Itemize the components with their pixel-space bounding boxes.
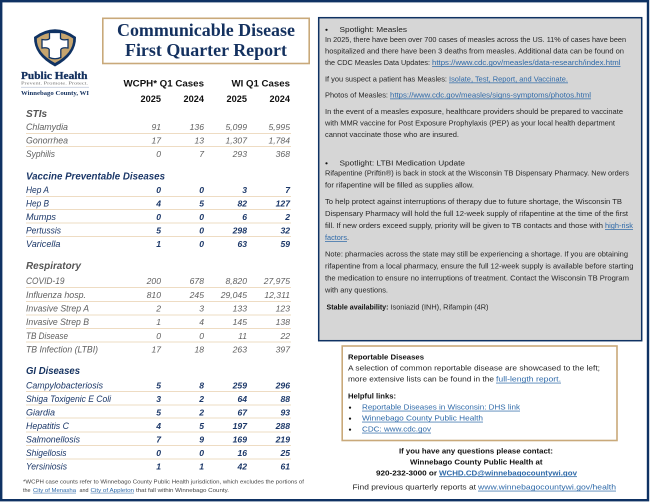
contact information: Winnebago County Public Health at	[410, 457, 543, 466]
row: Pertussis: 32	[280, 226, 290, 236]
contact information: If you have any questions please contact:	[399, 446, 553, 455]
footnote: *WCPH case counts refer to Winnebago County Public Health jurisdiction, which excludes the portions of	[23, 480, 305, 486]
row: Hep B: 127	[276, 198, 291, 208]
row: Campylobacteriosis: Campylobacteriosis	[26, 380, 104, 390]
row: TB Infection (LTBI): 18	[194, 344, 204, 354]
row: TB Disease	[26, 331, 290, 341]
previous reports link: Find previous quarterly reports at	[352, 483, 476, 492]
row: Yersiniosis: 1	[199, 462, 204, 472]
row: Influenza hosp.: 12,311	[264, 290, 290, 300]
row: Influenza hosp.	[26, 290, 290, 300]
row: Salmonellosis: 169	[233, 434, 247, 444]
row: Influenza hosp.: 29,045	[220, 290, 247, 300]
row: Mumps	[26, 212, 290, 222]
logo county name: Winnebago County, WI	[21, 91, 90, 97]
row: Hep B: 82	[237, 198, 247, 208]
spotlight: LTBI medication update: Note: pharmacies across the state may still be experiencing a shortage. If you are obtaining	[325, 250, 628, 259]
row: Hep A: 0	[156, 185, 161, 195]
spotlight: measles: with MMR vaccine for Post Exposure Prophylaxis (PEP) as your local health department	[324, 119, 615, 128]
row: COVID-19: 200	[146, 276, 161, 286]
row: Salmonellosis: Salmonellosis	[26, 434, 81, 444]
row: Shiga Toxigenic E Coli: Shiga Toxigenic E Coli	[26, 394, 112, 404]
spotlight: LTBI medication update: rifapentine from a local pharmacy, ensure the full 12-week supply is available before starting	[325, 262, 634, 271]
row: Hepatitis C: 4	[155, 421, 161, 431]
row: Shiga Toxigenic E Coli: 3	[156, 394, 161, 404]
spotlight: measles: Spotlight: Measles	[340, 25, 407, 34]
row: Gonorrhea	[26, 136, 290, 146]
row: TB Disease: 22	[279, 331, 290, 341]
row: Syphilis: 293	[232, 149, 247, 159]
row: Salmonellosis	[26, 434, 290, 444]
table column headers	[124, 78, 291, 104]
row: TB Infection (LTBI): 17	[151, 344, 162, 354]
row: COVID-19: 27,975	[263, 276, 290, 286]
spotlight: LTBI medication update: Isoniazid (INH), Rifampin (4R)	[390, 302, 488, 311]
table section: Vaccine Preventable Diseases	[26, 172, 291, 249]
row: Syphilis	[26, 149, 290, 159]
panel: reportable diseases: Helpful links:	[348, 391, 396, 400]
row: Campylobacteriosis	[26, 380, 290, 390]
row: Invasive Strep A: 133	[233, 304, 247, 314]
spotlight: measles: https://www.cdc.gov/measles/data-research/index.html	[432, 58, 621, 67]
helpful links list: Reportable Diseases in Wisconsin: DHS link	[362, 403, 520, 412]
row: TB Disease: 11	[238, 331, 247, 341]
row: Chlamydia: 91	[151, 122, 161, 132]
title box: Communicable Disease	[117, 20, 295, 40]
row: Invasive Strep A: 123	[276, 304, 290, 314]
row: Chlamydia: 136	[190, 122, 204, 132]
spotlight: LTBI medication update: factors	[325, 233, 347, 242]
row: Influenza hosp.: 810	[147, 290, 161, 300]
table section: GI Diseases	[26, 366, 291, 472]
row: TB Infection (LTBI)	[26, 344, 291, 354]
spotlight: LTBI medication update: fill. If new orders exceed supply, priority will be given to TB contacts and those with	[325, 221, 603, 230]
footnote	[23, 480, 305, 494]
row: Mumps: Mumps	[26, 212, 57, 222]
row: Hepatitis C: Hepatitis C	[26, 421, 70, 431]
row: Invasive Strep B: 145	[233, 317, 247, 327]
row: Shigellosis: 0	[199, 448, 204, 458]
row: Pertussis: Pertussis	[26, 226, 62, 236]
spotlight: measles: the CDC Measles Data Updates:	[325, 58, 430, 67]
table column headers: 2024	[270, 94, 291, 104]
row: Hepatitis C: 197	[233, 421, 248, 431]
spotlight: measles: https://www.cdc.gov/measles/signs-symptoms/photos.html	[390, 90, 591, 100]
row: COVID-19: COVID-19	[26, 276, 65, 286]
row: Varicella	[26, 239, 290, 249]
row: COVID-19: 8,820	[225, 276, 247, 286]
row: Shigellosis: 25	[279, 448, 290, 458]
row: Invasive Strep B: 4	[199, 317, 204, 327]
spotlight: LTBI medication update: the medication to ensure no interruptions of treatment. Contact the Wisconsin TB Program	[325, 274, 629, 283]
contact information: WCHD.CD@winnebagocountywi.gov	[439, 468, 578, 477]
helpful links list: Winnebago County Public Health	[362, 414, 483, 423]
table column headers: 2025	[141, 94, 161, 104]
table section: STIs	[26, 109, 291, 159]
title box: First Quarter Report	[125, 40, 287, 60]
row: Hep B	[26, 198, 291, 208]
table column headers: 2024	[184, 94, 205, 104]
row: Invasive Strep B	[26, 317, 290, 327]
row: COVID-19: 678	[190, 276, 204, 286]
table column headers: WI Q1 Cases	[232, 78, 290, 88]
footnote: that fall within Winnebago County.	[136, 488, 229, 494]
row: TB Infection (LTBI): 263	[232, 344, 247, 354]
row: Invasive Strep A: Invasive Strep A	[26, 304, 89, 314]
row: Hep B: Hep B	[26, 198, 49, 208]
spotlight: LTBI medication update: high-risk	[605, 221, 633, 230]
row: Campylobacteriosis: 8	[199, 380, 204, 390]
row: Hep A: 3	[242, 185, 247, 195]
row: Giardia	[26, 408, 290, 418]
table section: GI Diseases: GI Diseases	[26, 366, 80, 377]
row: Chlamydia: Chlamydia	[26, 122, 68, 132]
row: Influenza hosp.: 245	[189, 290, 204, 300]
icon: shield	[34, 29, 76, 66]
row: Shiga Toxigenic E Coli: 88	[280, 394, 290, 404]
spotlight: LTBI medication update	[324, 158, 634, 311]
row: Mumps: 0	[199, 212, 204, 222]
logo: Winnebago County Public Health	[21, 29, 90, 97]
row: Varicella: 63	[237, 239, 247, 249]
spotlight: LTBI medication update: for rifapentine will be filled as supplies allow.	[325, 181, 474, 190]
row: Campylobacteriosis: 259	[232, 380, 247, 390]
row: Varicella: 1	[156, 239, 161, 249]
panel: spotlights	[319, 18, 642, 341]
row: Giardia: Giardia	[26, 408, 55, 418]
table column headers: 2025	[227, 94, 247, 104]
row: Gonorrhea: 1,307	[225, 136, 248, 146]
row: COVID-19	[26, 276, 290, 286]
row: Giardia: 67	[237, 408, 248, 418]
row: Mumps: 6	[242, 212, 247, 222]
contact information: 920-232-3000 or	[376, 468, 437, 477]
spotlight: LTBI medication update: Dispensary Pharmacy will hold the full 12-week supply of rifapentine at the time of the first	[325, 209, 628, 218]
row: Chlamydia: 5,995	[268, 122, 290, 132]
row: Giardia: 5	[156, 408, 161, 418]
row: Gonorrhea: Gonorrhea	[26, 136, 68, 146]
row: TB Infection (LTBI): 397	[276, 344, 291, 354]
panel: reportable diseases: more extensive lists can be found in the	[348, 375, 494, 384]
row: Invasive Strep A: 3	[199, 304, 204, 314]
row: Gonorrhea: 1,784	[268, 136, 290, 146]
row: TB Disease: TB Disease	[26, 331, 68, 341]
row: Campylobacteriosis: 5	[156, 380, 161, 390]
row: Chlamydia: 5,099	[225, 122, 247, 132]
row: Varicella: 59	[280, 239, 290, 249]
row: Yersiniosis	[26, 462, 290, 472]
row: Hep B: 5	[199, 198, 204, 208]
row: Salmonellosis: 219	[275, 434, 290, 444]
row: Pertussis: 0	[199, 226, 204, 236]
row: Varicella: Varicella	[26, 239, 61, 249]
spotlight: measles: In 2025, there have been over 700 cases of measles across the US. 11% of cases have been	[325, 35, 626, 44]
panel: reportable diseases: A selection of common reportable disease are showcased to the left;	[348, 364, 600, 373]
helpful links list	[349, 403, 520, 434]
table section: Vaccine Preventable Diseases: Vaccine Preventable Diseases	[26, 172, 165, 182]
row: Shiga Toxigenic E Coli	[26, 394, 290, 404]
panel: reportable diseases: Reportable Diseases	[348, 352, 424, 361]
spotlight: measles: cannot vaccinate those who are insured.	[325, 130, 459, 139]
row: Salmonellosis: 9	[199, 434, 204, 444]
row: Shigellosis: 16	[237, 448, 247, 458]
row: TB Disease: 0	[156, 331, 161, 341]
row: TB Disease: 0	[199, 331, 204, 341]
spotlight: LTBI medication update: To help protect against interruptions of therapy due to future shortage, the Wisconsin TB	[325, 197, 622, 206]
spotlight: measles: hospitalized and there have been 3 deaths from measles. Additional data can be found on	[325, 46, 624, 56]
row: Shiga Toxigenic E Coli: 2	[198, 394, 204, 404]
row: Hepatitis C	[26, 421, 290, 431]
spotlight: measles: In the event of a measles exposure, healthcare providers should be prepared to vaccinate	[325, 107, 623, 116]
row: Hep B: 4	[155, 198, 161, 208]
row: Gonorrhea: 13	[194, 136, 204, 146]
title box	[103, 18, 309, 64]
table section: STIs: STIs	[26, 109, 48, 120]
row: Gonorrhea: 17	[151, 136, 162, 146]
row: Pertussis	[26, 226, 290, 236]
contact information	[376, 446, 578, 477]
row: Influenza hosp.: Influenza hosp.	[26, 290, 86, 300]
row: Hep A	[26, 185, 291, 195]
row: Syphilis: 7	[199, 149, 205, 159]
row: Giardia: 2	[198, 408, 204, 418]
row: Syphilis: Syphilis	[26, 149, 56, 159]
spotlight: LTBI medication update: .	[347, 233, 349, 242]
panel: reportable diseases	[342, 346, 617, 440]
row: Syphilis: 0	[156, 149, 161, 159]
spotlight: measles: Isolate, Test, Report, and Vaccinate.	[449, 74, 568, 84]
row: Hep A: Hep A	[26, 185, 49, 195]
row: Shigellosis: 0	[156, 448, 161, 458]
row: Shigellosis	[26, 448, 290, 458]
previous reports link: www.winnebagocountywi.gov/health	[477, 483, 616, 492]
spotlight: LTBI medication update: Stable availability:	[326, 302, 388, 311]
row: Pertussis: 298	[232, 226, 247, 236]
row: Hepatitis C: 5	[199, 421, 204, 431]
footnote: City of Appleton	[90, 488, 134, 494]
row: Invasive Strep A	[26, 304, 290, 314]
row: Giardia: 93	[280, 408, 290, 418]
row: Pertussis: 5	[156, 226, 161, 236]
row: Shiga Toxigenic E Coli: 64	[237, 394, 247, 404]
spotlight: LTBI medication update: Rifapentine (Priftin®) is back in stock at the Wisconsin TB Dispensary Pharmacy. New orders	[325, 168, 629, 178]
footnote: City of Menasha	[33, 488, 76, 494]
row: Shigellosis: Shigellosis	[26, 448, 67, 458]
row: Hepatitis C: 288	[275, 421, 290, 431]
row: Yersiniosis: 1	[156, 462, 161, 472]
spotlight: measles: Photos of Measles:	[325, 90, 388, 100]
row: Campylobacteriosis: 296	[275, 380, 290, 390]
spotlight: LTBI medication update: Spotlight: LTBI Medication Update	[340, 158, 465, 168]
table section: Respiratory: Respiratory	[26, 261, 81, 272]
footnote: the	[23, 488, 30, 494]
row: Yersiniosis: 61	[280, 462, 290, 472]
row: Invasive Strep B: Invasive Strep B	[26, 317, 89, 327]
row: Mumps: 0	[156, 212, 161, 222]
spotlight: measles: If you suspect a patient has Measles:	[325, 74, 447, 84]
row: Invasive Strep A: 2	[155, 304, 161, 314]
logo wordmark: Public Health	[21, 70, 88, 82]
row: Varicella: 0	[199, 239, 204, 249]
table column headers: WCPH* Q1 Cases	[124, 78, 204, 88]
row: Invasive Strep B: 138	[276, 317, 290, 327]
row: Yersiniosis: 42	[236, 462, 247, 472]
row: Syphilis: 368	[276, 149, 290, 159]
spotlight: LTBI medication update: with any questions.	[324, 286, 388, 295]
row: TB Infection (LTBI): TB Infection (LTBI)	[26, 344, 98, 354]
row: Chlamydia	[26, 122, 290, 132]
panel: reportable diseases: full-length report.	[496, 375, 561, 384]
logo tagline: Prevent. Promote. Protect.	[21, 81, 88, 86]
row: Hep A: 0	[199, 185, 204, 195]
footnote: and	[80, 488, 88, 494]
row: Invasive Strep B: 1	[156, 317, 161, 327]
row: Salmonellosis: 7	[156, 434, 162, 444]
row: Yersiniosis: Yersiniosis	[26, 462, 68, 472]
helpful links list: CDC: www.cdc.gov	[362, 425, 431, 434]
previous reports link	[352, 483, 616, 492]
spotlight: measles	[324, 25, 626, 139]
row: Mumps: 2	[284, 212, 290, 222]
row: Hep A: 7	[285, 185, 291, 195]
table section: Respiratory	[26, 261, 291, 354]
